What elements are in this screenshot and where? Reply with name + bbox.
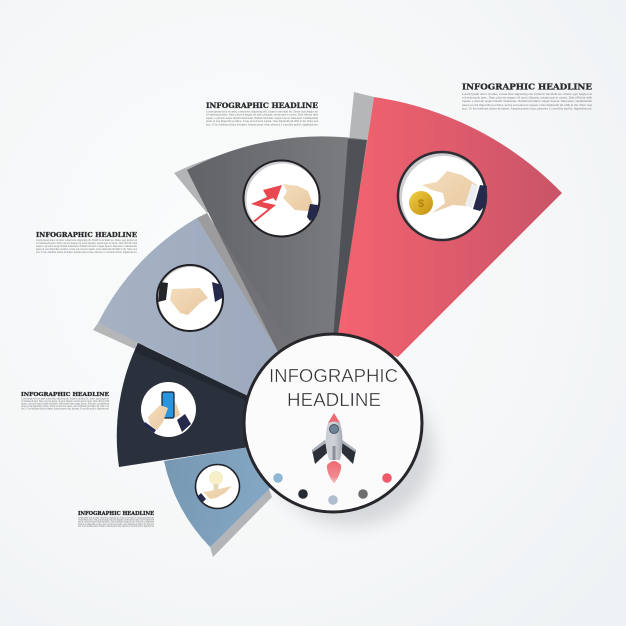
text block 3: purus ut erat imperdiet porttitor, lectus sed placerat sapien, vitae dignissim mi nibh ut mi. Nunc non xyxy=(36,247,137,252)
text block 3: INFOGRAPHIC HEADLINE xyxy=(36,231,137,239)
segment: light blue-gray xyxy=(93,213,290,397)
text block 4: Lorem ipsum dolor sit amet, consectetur adipiscing elit. Etiam in tincidunt leo. Donec eget feugiat est xyxy=(21,398,109,400)
icon: coin in hand xyxy=(398,152,487,240)
segment: steel blue xyxy=(164,447,272,557)
icon: pointing hand and arrow xyxy=(244,160,320,236)
text block 4: erat. Ut leo habitant platea dictumst. Aenean purus risus, pharetra a convallis mollis, dignissim nec xyxy=(21,408,110,410)
text block 5: sapien, a placerat neque blandit malesuada. Nullam tincidunt congue laoreet. Maecenas condimentum xyxy=(78,521,154,524)
text block 3: vel malesuada justo. Nunc placerat magna vel porta aliquam, rutrum quis in cursus. Duis efficitur nibh xyxy=(36,241,137,246)
text block 5 xyxy=(78,511,155,528)
text block 2: INFOGRAPHIC HEADLINE xyxy=(206,101,318,110)
text block 1: vel malesuada justo. Nunc placerat magna vel porta aliquam, rutrum quis in cursus. Duis efficitur nibh xyxy=(462,96,592,101)
text block 4: INFOGRAPHIC HEADLINE xyxy=(21,392,110,398)
icon: handshake xyxy=(157,265,223,331)
text block 5: Lorem ipsum dolor sit amet, consectetur adipiscing elit. Etiam in tincidunt leo. Donec eget feugiat est xyxy=(78,516,154,520)
icon: light bulb on hand xyxy=(196,464,240,508)
center title xyxy=(269,366,398,410)
segment: red xyxy=(337,92,562,357)
segment: dark gray xyxy=(174,136,367,352)
text block 3: Lorem ipsum dolor sit amet, consectetur adipiscing elit. Etiam in tincidunt leo. Donec eget feugiat est xyxy=(36,238,137,243)
legend dots xyxy=(273,473,392,505)
center circle shadow xyxy=(270,378,434,526)
center title: HEADLINE xyxy=(287,390,381,410)
text block 1: INFOGRAPHIC HEADLINE xyxy=(462,82,593,92)
text block 2: erat. Ut leo habitant platea dictumst. Aenean purus risus, pharetra a convallis mollis, dignissim nec xyxy=(206,122,319,127)
center circle xyxy=(244,334,422,512)
text block 4: purus ut erat imperdiet porttitor, lectus sed placerat sapien, vitae dignissim mi nibh ut mi. Nunc non xyxy=(21,405,109,408)
icon: phone in hands xyxy=(141,382,196,437)
text block 3: erat. Ut leo habitant platea dictumst. Aenean purus risus, pharetra a convallis mollis, dignissim nec xyxy=(36,250,137,255)
text block 4: sapien, a placerat neque blandit malesuada. Nullam tincidunt congue laoreet. Maecenas condimentum xyxy=(21,402,110,406)
text block 1: erat. Ut leo habitant platea dictumst. Aenean purus risus, pharetra a convallis mollis, dignissim nec xyxy=(462,106,593,111)
text block 3 xyxy=(36,231,137,255)
text block 2: sapien, a placerat neque blandit malesuada. Nullam tincidunt congue laoreet. Maecenas condimentum xyxy=(206,116,318,121)
text block 5: INFOGRAPHIC HEADLINE xyxy=(78,511,154,517)
text block 1: sapien, a placerat neque blandit malesuada. Nullam tincidunt congue laoreet. Maecenas condimentum xyxy=(462,99,593,104)
text block 1: purus ut erat imperdiet porttitor, lectus sed placerat sapien, vitae dignissim mi nibh ut mi. Nunc non xyxy=(462,103,592,108)
text block 2: purus ut erat imperdiet porttitor, lectus sed placerat sapien, vitae dignissim mi nibh ut mi. Nunc non xyxy=(206,119,318,124)
icon: coin in hand: $ xyxy=(418,198,424,210)
text block 4 xyxy=(21,392,110,410)
text block 2: vel malesuada justo. Nunc placerat magna vel porta aliquam, rutrum quis in cursus. Duis efficitur nibh xyxy=(206,113,318,118)
text block 5: purus ut erat imperdiet porttitor, lectus sed placerat sapien, vitae dignissim mi nibh ut mi. Nunc non xyxy=(78,523,155,526)
text block 1: Lorem ipsum dolor sit amet, consectetur adipiscing elit. Etiam in tincidunt leo. Donec eget feugiat est xyxy=(462,92,592,97)
center title: INFOGRAPHIC xyxy=(269,366,398,386)
text block 1 xyxy=(462,82,593,111)
segment: dark navy xyxy=(117,343,250,467)
text block 2 xyxy=(206,101,319,127)
icon: rocket xyxy=(312,413,356,484)
text block 5: vel malesuada justo. Nunc placerat magna vel porta aliquam, rutrum quis in cursus. Duis efficitur nibh xyxy=(78,519,154,522)
text block 3: sapien, a placerat neque blandit malesuada. Nullam tincidunt congue laoreet. Maecenas condimentum xyxy=(36,244,137,249)
text block 4: vel malesuada justo. Nunc placerat magna vel porta aliquam, rutrum quis in cursus. Duis efficitur nibh xyxy=(21,400,109,403)
text block 2: Lorem ipsum dolor sit amet, consectetur adipiscing elit. Etiam in tincidunt leo. Donec eget feugiat est xyxy=(206,110,318,114)
text block 5: erat. Ut leo habitant platea dictumst. Aenean purus risus, pharetra a convallis mollis, dignissim nec xyxy=(78,525,155,528)
